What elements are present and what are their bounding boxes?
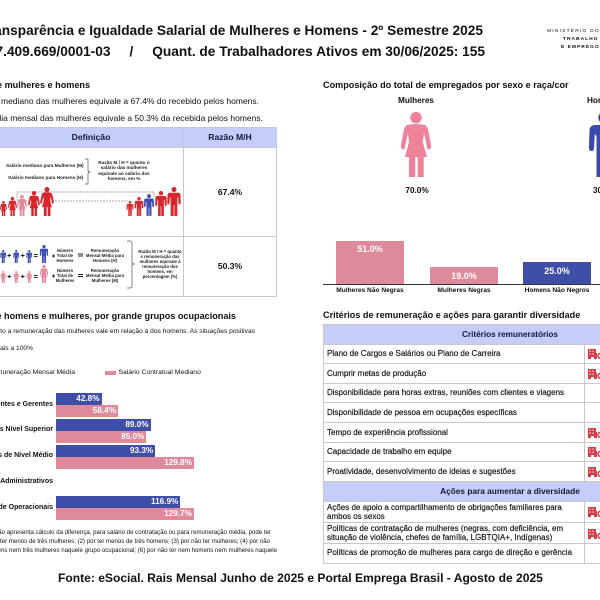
bar chart: grupos ocupacionais: 129.7% [164, 509, 192, 518]
header: definição: Definição [72, 132, 110, 142]
bar chart: sexo e raça/cor: Mulheres Não Negras [336, 286, 404, 294]
bar chart: sexo e raça/cor [323, 241, 600, 294]
diagram: remuneração média: Mensal Média para [86, 272, 124, 278]
table: critérios e ações: Cumprir metas de produção [327, 369, 426, 378]
table: critérios e ações: Proatividade, desenvolvimento de ideias e sugestões [327, 467, 516, 476]
diagram: remuneração média: Mensal Média para [86, 252, 124, 258]
diagram: salário mediano: Salário mediano para Mulheres (M) [6, 163, 84, 168]
diagram: remuneração média: remuneração dos [142, 264, 178, 269]
heading: composição: Composição do total de empregados por sexo e raça/cor [323, 80, 569, 90]
diagram: remuneração média: Mulheres [56, 278, 74, 282]
diagram: salário mediano: equivale ao salário dos [98, 171, 150, 176]
table: critérios e ações: Capacidade de trabalho em equipe [327, 447, 452, 456]
header: ações diversidade: Ações para aumentar a diversidade [440, 486, 580, 496]
diagram: remuneração média: Total de [57, 252, 73, 258]
table: critérios e ações: Disponibilidade para horas extras, reuniões com clientes e viagens [327, 388, 564, 397]
header: definição [0, 127, 184, 148]
pictogram: mulheres: 70.0% [405, 186, 429, 195]
bar chart: grupos ocupacionais: 58.4% [93, 406, 116, 415]
diagram: remuneração média: mulheres equivale à [139, 259, 181, 264]
diagram: remuneração média: Homens [57, 258, 73, 262]
row: remuneração média [0, 236, 184, 297]
bar: mulheres negras: 19.0% [451, 271, 477, 281]
bar: mulheres negras [430, 267, 498, 284]
bar chart: grupos ocupacionais: 85.0% [121, 432, 144, 441]
diagram: salário mediano: homens, em % [108, 176, 140, 181]
bar: homens não negros [523, 262, 591, 284]
diagram: salário mediano: Salário mediano para Homens (H) [8, 174, 83, 180]
legend: Salário Contratual Mediano [118, 369, 201, 376]
diagram: remuneração média [0, 240, 182, 288]
diagram: remuneração média: Total de [57, 272, 73, 278]
legend [0, 369, 201, 376]
diagram: salário mediano: salário das mulheres [101, 165, 147, 170]
diagram: remuneração média: a remuneração das [140, 254, 180, 259]
table: critérios e ações: Disponibilidade de pessoa em ocupações específicas [327, 408, 517, 417]
pictogram: homens [587, 96, 600, 195]
table: critérios e ações: Políticas de contratação de mulheres (negras, com deficiência, em [327, 524, 563, 533]
value: 50.3% [183, 236, 277, 297]
diagram: remuneração média: Remuneração [91, 248, 119, 252]
table: critérios e ações: Plano de Cargos e Salários ou Plano de Carreira [327, 349, 500, 358]
diagram: remuneração média: Razão M / H = quanto [138, 249, 182, 254]
diagram: remuneração média: Número [57, 248, 73, 252]
logo: ministério: MINISTÉRIO DO [547, 28, 600, 34]
bar chart: grupos ocupacionais: 42.8% [76, 394, 100, 403]
bar chart: grupos ocupacionais: 129.8% [164, 458, 192, 467]
diagram: remuneração média: Mulheres (M) [92, 278, 118, 282]
diagram: salário mediano: Razão M / H = quanto o [98, 160, 150, 165]
pictogram: mulheres: Mulheres [398, 96, 434, 105]
title [0, 23, 485, 59]
table: critérios e ações: Tempo de experiência profissional [327, 428, 448, 437]
bar chart: sexo e raça/cor: Homens Não Negros [525, 286, 589, 294]
header: critérios remuneratórios: Critérios remuneratórios [462, 330, 558, 339]
bar chart: grupos ocupacionais [0, 393, 194, 520]
value: 67.4%: 67.4% [218, 187, 242, 197]
diagram: remuneração média: Número [57, 268, 73, 272]
header: razão M/H: Razão M/H [208, 132, 252, 142]
header: critérios remuneratórios [323, 324, 600, 345]
table: definição e razão [0, 127, 277, 297]
diagram: remuneração média: porcentagem (%) [143, 274, 177, 279]
diagram: salário mediano [0, 158, 181, 216]
bar chart: sexo e raça/cor: Mulheres Negras [437, 286, 491, 294]
bar chart: grupos ocupacionais: 93.3% [130, 446, 153, 455]
diagram: remuneração média: Homens (H) [93, 258, 117, 262]
value: 50.3%: 50.3% [218, 261, 242, 271]
diagram: remuneração média: Remuneração [91, 268, 119, 272]
pictogram: mulheres [398, 96, 434, 195]
bar: mulheres não negras [336, 240, 404, 284]
bar: homens não negros: 25.0% [544, 266, 570, 276]
row: salário mediano [0, 147, 184, 237]
bar: mulheres não negras: 51.0% [357, 244, 383, 254]
value: 67.4% [183, 147, 277, 237]
heading: critérios: Critérios de remuneração e ações para garantir diversidade [323, 310, 580, 320]
text: nota de rodapé [0, 529, 277, 554]
table: critérios e ações: Ações de apoio a compartilhamento de obrigações familiares para [327, 502, 562, 512]
logo: ministério: E EMPREGO [561, 44, 600, 50]
diagram: remuneração média: homens, em [147, 269, 173, 274]
logo: ministério: TRABALHO [563, 36, 598, 42]
footer: fonte: Fonte: eSocial. Rais Mensal Junho de 2025 e Portal Emprega Brasil - Agosto de 2025 [58, 571, 543, 585]
logo: ministério [547, 28, 600, 50]
bar chart: grupos ocupacionais: 89.0% [125, 420, 149, 429]
text: explicação [0, 328, 255, 352]
header: ações diversidade [323, 481, 600, 502]
bar chart: grupos ocupacionais: 116.9% [151, 497, 178, 506]
header: razão M/H [183, 127, 277, 148]
table: critérios e ações: Políticas de promoção de mulheres para cargo de direção e gerência [327, 548, 572, 557]
table: critérios e ações: ambos os sexos [327, 512, 385, 521]
table: critérios e ações: situação de violência, chefes de família, LGBTQIA+, Indígenas) [327, 533, 552, 542]
